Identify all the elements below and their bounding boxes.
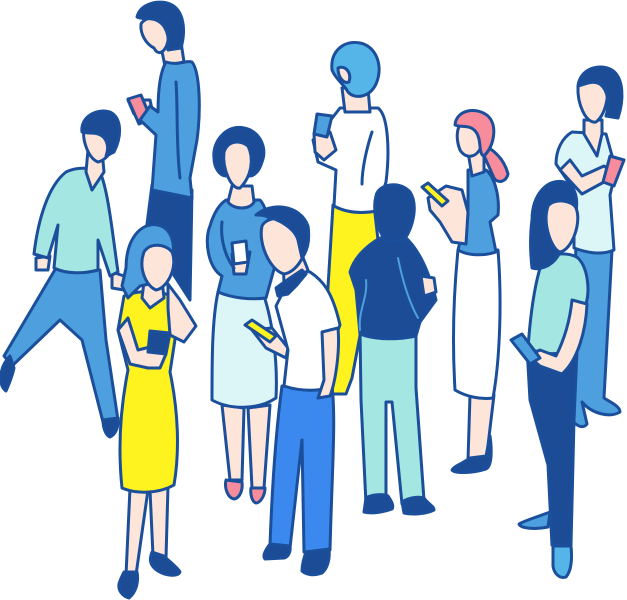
person: man walking in aqua sweater and blue trousers: [1, 111, 124, 437]
person: man in white and aqua shirt with sky blue trousers: [556, 67, 624, 427]
person: man in navy jacket and aqua trousers: [350, 185, 436, 514]
person: woman with pink hair, blue top and white skirt: [422, 110, 508, 473]
person: woman with long dark hair, aqua top and navy trousers: [511, 181, 588, 577]
person: man with light blue hair, white shirt and yellow trousers: [313, 42, 388, 394]
person: man in blue shirt holding pink phone: [128, 2, 199, 300]
person: woman in yellow dress with blue hair: [118, 225, 196, 598]
person: woman in blue top and pale blue skirt: [207, 127, 276, 503]
person: man with white shirt and bright blue trousers holding yellow phone: [245, 207, 340, 575]
